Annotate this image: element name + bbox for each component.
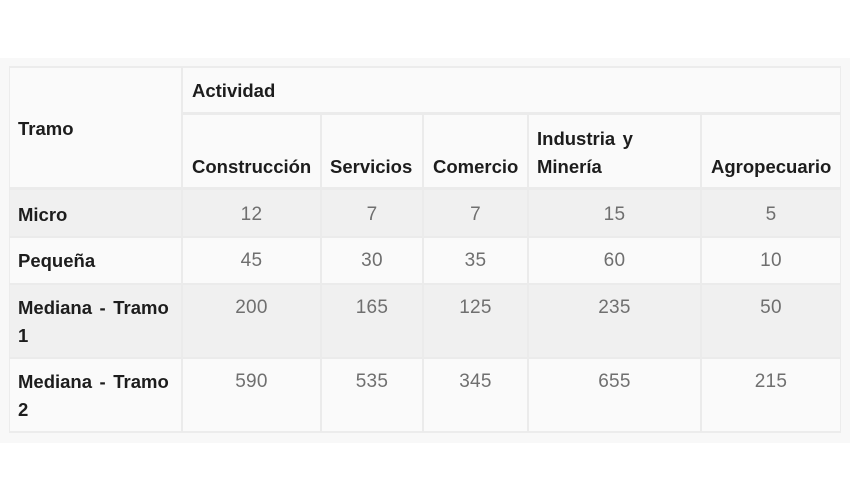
row: Micro: Micro: [18, 204, 67, 224]
header: Construcción: Construcción: [192, 156, 311, 176]
header: Servicios: Servicios: [330, 156, 412, 176]
row shading: Mediana - Tramo 1: [10, 284, 840, 358]
row: Mediana - Tramo 2: 590: [235, 371, 268, 392]
row shading: Micro: [10, 190, 840, 237]
row: Mediana - Tramo 2: 345: [459, 371, 492, 392]
row: Mediana - Tramo 1: 200: [235, 297, 268, 318]
row: Pequeña: 10: [760, 250, 782, 271]
row: Micro: [18, 204, 776, 225]
row: Micro: 5: [766, 204, 776, 225]
row: Mediana - Tramo 2: Mediana - Tramo: [18, 370, 169, 392]
header: Industria y Minería: Minería: [537, 156, 602, 176]
row: Pequeña: [18, 250, 782, 271]
row: Pequeña: 45: [241, 250, 262, 271]
header: Agropecuario: Agropecuario: [711, 156, 831, 176]
row: Micro: 12: [241, 204, 262, 225]
row: Mediana - Tramo 2: 215: [755, 371, 787, 392]
row: Mediana - Tramo 1: 165: [356, 297, 388, 318]
row: Pequeña: 30: [361, 250, 383, 271]
header: Tramo: Tramo: [18, 118, 74, 138]
header: Actividad: Actividad: [192, 80, 275, 100]
row: Pequeña: 35: [465, 250, 486, 271]
table: [9, 66, 841, 433]
row: Mediana - Tramo 1: 125: [459, 297, 492, 318]
row: Mediana - Tramo 1: 235: [598, 297, 631, 318]
row: Pequeña: Pequeña: [18, 250, 95, 270]
row: Mediana - Tramo 2: [18, 370, 787, 420]
row: Mediana - Tramo 1: [18, 296, 782, 346]
row: Mediana - Tramo 2: 655: [598, 371, 631, 392]
row: Micro: 15: [604, 204, 625, 225]
row: Mediana - Tramo 2: 2: [18, 398, 28, 420]
header: Comercio: Comercio: [433, 156, 518, 176]
header: Industria y Minería: [537, 128, 633, 176]
row: Mediana - Tramo 1: 50: [760, 297, 782, 318]
header: Industria y Minería: Industria y: [537, 128, 633, 148]
row: Mediana - Tramo 1: Mediana - Tramo: [18, 296, 169, 318]
row: Mediana - Tramo 1: 1: [18, 324, 28, 346]
row: Micro: 7: [470, 204, 481, 225]
row: Mediana - Tramo 2: 535: [356, 371, 388, 392]
panel: table background: [0, 58, 850, 443]
row: Micro: 7: [367, 204, 377, 225]
row: Pequeña: 60: [604, 250, 625, 271]
